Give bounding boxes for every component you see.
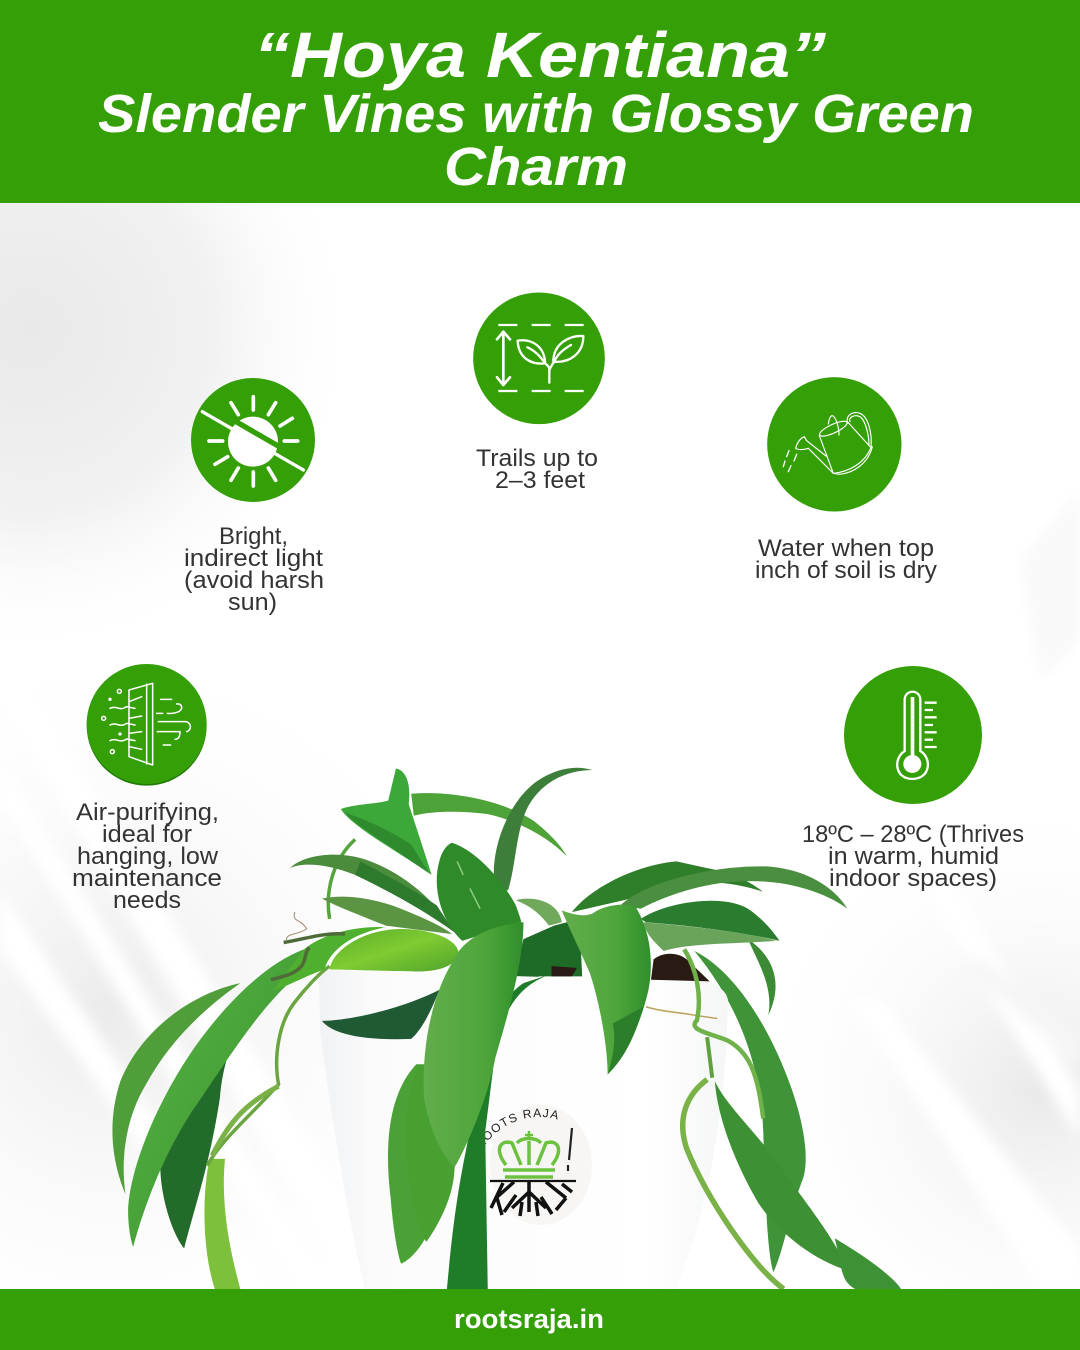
label: air purifying: needs [113, 887, 181, 914]
label: length [476, 445, 598, 494]
label: light: indirect light [184, 545, 323, 572]
label: length: 2–3 feet [495, 467, 585, 494]
feature: bright indirect light [184, 378, 324, 616]
feature: air purifying [72, 664, 222, 914]
footer band [0, 1289, 1080, 1350]
label: light: Bright, [219, 523, 288, 550]
label: light [184, 523, 324, 616]
icon: thermometer [844, 666, 982, 804]
feature: trailing length [473, 292, 605, 494]
label: air purifying: maintenance [72, 865, 222, 892]
label: air purifying: ideal for [102, 821, 192, 848]
front leaves and vines [128, 905, 901, 1289]
white pot [319, 970, 728, 1289]
label: watering: inch of soil is dry [755, 557, 937, 584]
icon: air filter [87, 664, 207, 786]
label: air purifying [72, 799, 222, 914]
label: light: sun) [228, 589, 277, 616]
title: “Hoya Kentiana” [254, 19, 826, 91]
icon: watering can [767, 377, 901, 511]
label: light: (avoid harsh [184, 567, 324, 594]
sticker logo: ROOTS RAJA [485, 1108, 558, 1144]
header band [0, 0, 1080, 203]
sticker logo [485, 1105, 592, 1225]
title: Charm [444, 137, 628, 197]
back leaves, group [112, 768, 847, 1272]
label: air purifying: hanging, low [77, 843, 219, 870]
label: temperature [802, 821, 1024, 892]
website: rootsraja.in [454, 1304, 604, 1334]
icon: crossed out sun [191, 378, 315, 502]
label: watering: Water when top [758, 535, 934, 562]
feature: watering [755, 377, 937, 584]
label: temperature: in warm, humid [828, 843, 999, 870]
icon: plant with height arrow [473, 292, 605, 424]
label: temperature: 18ºC – 28ºC (Thrives [802, 821, 1024, 848]
label: temperature: indoor spaces) [829, 865, 997, 892]
title: Slender Vines with Glossy Green [98, 84, 974, 144]
label: watering [755, 535, 937, 584]
label: length: Trails up to [476, 445, 598, 472]
title [98, 19, 974, 197]
feature: temperature [802, 666, 1024, 892]
plant in white pot illustration [112, 768, 901, 1289]
label: air purifying: Air-purifying, [76, 799, 219, 826]
